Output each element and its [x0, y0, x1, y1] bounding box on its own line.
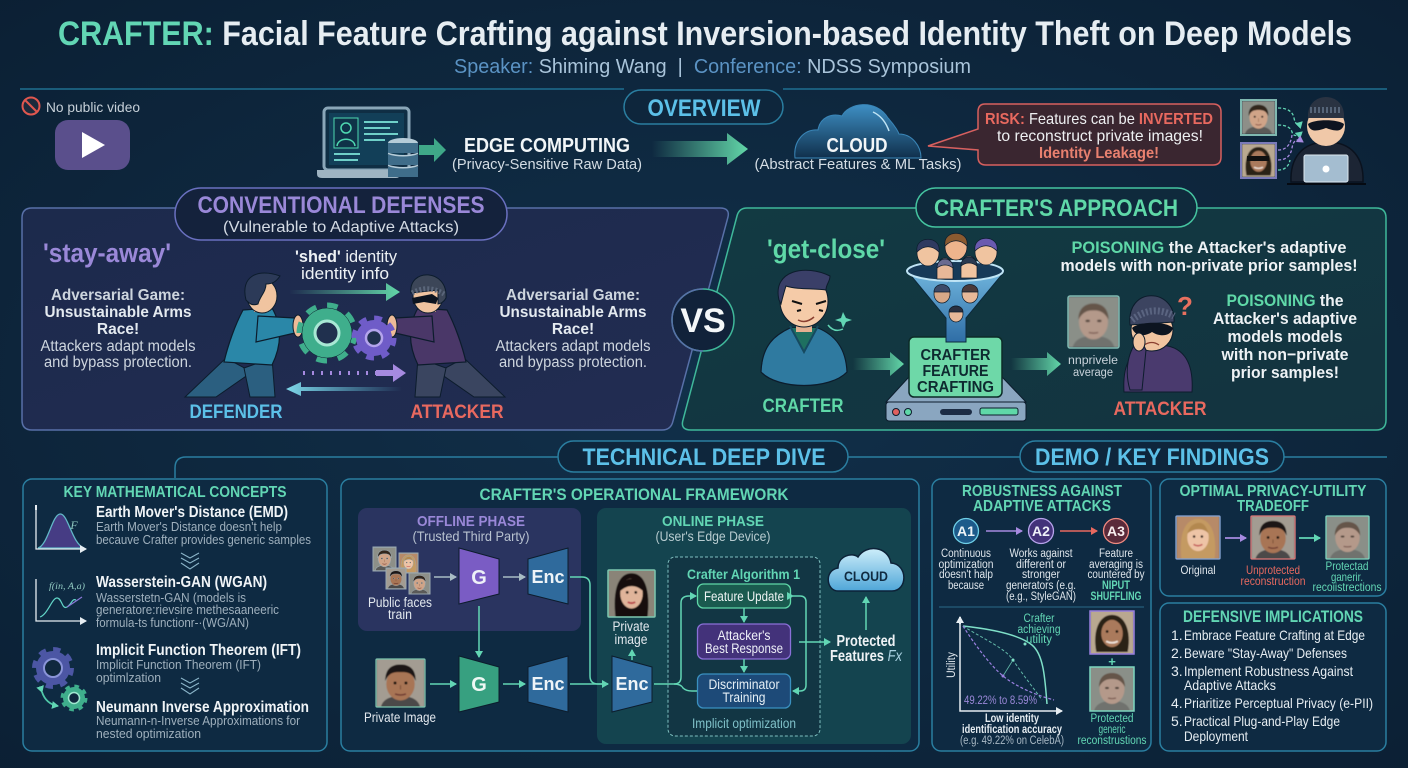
- image: original face: [1176, 516, 1220, 559]
- text: A3: averaging is: [1089, 559, 1143, 571]
- text: IFT: [96, 642, 301, 685]
- text: neumann: Neumann Inverse Approximation: [96, 699, 309, 716]
- text: edge computing: EDGE COMPUTING: [464, 135, 630, 157]
- list: implications: 2.: [1171, 645, 1183, 661]
- label: protected features: [830, 633, 903, 665]
- text: poisoning wide: POISONING the Attacker's adaptive: [1072, 238, 1346, 257]
- list: implications: 4.: [1171, 695, 1183, 711]
- text: poisoning wide: models with non-private prior samples!: [1060, 256, 1358, 275]
- arrow: A1 to A2: [986, 530, 1022, 532]
- arrow: offline encoder to online encoder: [570, 577, 608, 684]
- arrows: faces to hacker: [1278, 108, 1303, 170]
- heading: tradeoff: [1180, 483, 1367, 515]
- text: cloud: CLOUD: [826, 135, 888, 157]
- label: crafter achieving utility: [1018, 613, 1060, 646]
- label: protected generic reconstructions: ganerir.: [1331, 570, 1363, 584]
- image: private face: [376, 659, 425, 707]
- panel: robustness against adaptive attacks: [932, 479, 1151, 751]
- panel: operational framework: [341, 479, 919, 751]
- subtitle: speaker and conference: Speaker: Shiming Wang | Conference: NDSS Symposium: [454, 55, 971, 78]
- callout: risk: [928, 104, 1221, 165]
- heading: overview: [624, 90, 783, 124]
- panel: offline phase: OFFLINE PHASE: [417, 513, 525, 530]
- text: edge computing: (Privacy-Sensitive Raw Data): [452, 156, 642, 173]
- image: unprotected reconstruction: [1251, 516, 1295, 559]
- figure: crafter: [761, 270, 852, 386]
- icon: server base: [886, 378, 1026, 421]
- image: reconstructed face: [1090, 611, 1134, 654]
- label: low identification accuracy: (e.g. 49.22% on CelebA): [960, 735, 1064, 747]
- text: adversarial game left: Unsustainable Arms: [44, 304, 192, 321]
- badge: VS: [672, 289, 734, 351]
- icon: distribution chart: [36, 505, 86, 549]
- badge: VS: VS: [680, 302, 726, 340]
- figure: confused attacker: ?: [1177, 291, 1193, 321]
- arrow: crafter to funnel: [853, 352, 904, 376]
- label: protected features: Protected: [836, 633, 896, 650]
- text: cloud: [754, 135, 962, 173]
- text: IFT: Implicit Function Theorem (IFT): [96, 658, 261, 672]
- list: implications: Beware "Stay-Away" Defenses: [1184, 645, 1347, 661]
- text: cloud: (Abstract Features & ML Tasks): [754, 156, 962, 173]
- heading: technical deep dive: TECHNICAL DEEP DIVE: [582, 444, 826, 471]
- list: implications: Priaritize Perceptual Privacy (e-PII): [1184, 695, 1373, 711]
- label: implicit optimization: Implicit optimization: [692, 716, 796, 731]
- text: poisoning narrow: [1213, 291, 1357, 382]
- label: private image online: Private: [612, 619, 650, 634]
- text: IFT: optimlzation: [96, 671, 161, 685]
- label: unprotected reconstruction: [1240, 563, 1306, 588]
- label: protected generic reconstructions: recoiistrections: [1312, 580, 1382, 594]
- icon: cloud framework: CLOUD: [844, 568, 888, 584]
- notice: no public video: No public video: [46, 99, 140, 115]
- panel: key mathematical concepts: [23, 479, 327, 751]
- panel: optimal privacy-utility tradeoff: [1160, 479, 1386, 596]
- panel: offline phase: (Trusted Third Party): [412, 528, 530, 544]
- label: private image online: [612, 619, 650, 647]
- box: feature update: Feature Update: [704, 589, 784, 604]
- list: implications: Implement Robustness Against: [1184, 663, 1353, 679]
- text: adversarial game right: Race!: [552, 321, 594, 338]
- text: WGAN: formula-ts functionr-·(WG/AN): [96, 616, 249, 630]
- label: protected generic reconstructions: [1312, 559, 1382, 594]
- icon: video play button: [55, 120, 130, 170]
- panel: online phase: (User's Edge Device): [656, 528, 770, 544]
- label: crafter achieving utility: achieving: [1018, 624, 1060, 636]
- text: A2: stronger: [1022, 569, 1060, 581]
- box: attacker's best response: Best Response: [705, 641, 783, 656]
- label: protected generic reconstructions: Protectad: [1326, 559, 1368, 573]
- text: adversarial game left: Race!: [97, 321, 139, 338]
- label: crafter achieving utility: utility: [1026, 634, 1052, 646]
- label: attacker: ATTACKER: [410, 401, 504, 423]
- text: adversarial game right: and bypass protection.: [499, 354, 647, 371]
- badge: A1: A1: [957, 523, 975, 539]
- box: crafter feature crafting: FEATURE: [922, 363, 988, 380]
- list: implications: Practical Plug-and-Play Edge: [1184, 713, 1340, 729]
- list: implications: 1.: [1171, 627, 1183, 643]
- block: online encoder: Enc: [615, 674, 649, 694]
- text: edge computing: [452, 135, 642, 173]
- heading: robustness: ADAPTIVE ATTACKS: [973, 498, 1111, 515]
- text: poisoning narrow: Attacker's adaptive: [1213, 309, 1357, 328]
- icon: purple gear: [355, 319, 393, 357]
- block: encoder: [528, 656, 568, 712]
- list: implications: [1171, 627, 1373, 744]
- arrow: shed identity: [289, 283, 400, 301]
- figure: defender: [185, 273, 303, 397]
- chart: utility vs identification accuracy: 49.22% to 8.59%: [964, 693, 1037, 707]
- text: neumann: nested optimization: [96, 727, 201, 741]
- text: A3: Feature: [1099, 548, 1133, 560]
- block: online encoder: [612, 656, 652, 712]
- label: defender: DEFENDER: [190, 401, 282, 423]
- icon: funnel with faces: [907, 233, 1004, 342]
- label: protected features: Features Fx: [830, 648, 903, 665]
- callout: risk: to reconstruct private images!: [997, 128, 1203, 145]
- arrow: generator down: [478, 606, 480, 657]
- arrow: funnel to output: [1011, 352, 1061, 376]
- text: neumann: Neumann-n-Inverse Approximations for: [96, 714, 300, 728]
- arrow: encoder to online encoder: [570, 683, 608, 685]
- text: IFT: Implicit Function Theorem (IFT): [96, 642, 301, 659]
- panel: defensive implications: [1160, 603, 1386, 751]
- list: implications: Embrace Feature Crafting at Edge: [1184, 627, 1365, 643]
- list: implications: Adaptive Attacks: [1184, 677, 1276, 693]
- label: public faces train: Public faces: [368, 595, 432, 610]
- text: poisoning narrow: models models: [1228, 327, 1342, 346]
- arrow: laptop to edge computing: [419, 138, 446, 162]
- arrow: unprotected to protected: [1299, 537, 1320, 539]
- box: attacker's best response: Attacker's: [718, 628, 771, 643]
- text: WGAN: Wasserstein-GAN (WGAN): [96, 574, 267, 591]
- image: stolen faces: [1241, 100, 1276, 178]
- text: A2: (e.g., StyleGAN): [1006, 591, 1076, 603]
- caption: average: nnprivele: [1068, 355, 1118, 367]
- icon: WGAN chart: f(in, A,a): [49, 581, 85, 592]
- label: get-close: 'get-close': [767, 234, 885, 264]
- icon: chevrons: [181, 553, 199, 569]
- box: discriminator training: [698, 674, 790, 708]
- block: generator green: [459, 656, 499, 712]
- chart: utility vs identification accuracy: [946, 617, 1062, 711]
- text: A1: doesn't halp: [939, 569, 993, 581]
- box: feature update: [698, 584, 790, 608]
- label: low identification accuracy: Low identity: [985, 713, 1039, 725]
- text: shed identity: [295, 248, 398, 283]
- heading: conventional defenses: CONVENTIONAL DEFENSES: [198, 192, 484, 219]
- text: adversarial game left: [40, 287, 196, 371]
- label: low identification accuracy: [960, 713, 1064, 747]
- box: crafter feature crafting: CRAFTING: [917, 379, 994, 396]
- badge: A2: A2: [1032, 523, 1050, 539]
- panel: crafter algorithm 1: Crafter Algorithm 1: [687, 566, 800, 582]
- arrow: generator to encoder: [503, 576, 525, 578]
- badge: A3: [1104, 518, 1128, 544]
- label: protected generic reconstructions: generic: [1098, 724, 1126, 736]
- badge: A1: [954, 518, 978, 544]
- text: poisoning narrow: prior samples!: [1231, 363, 1339, 382]
- arrows: algorithm flow: [654, 596, 866, 691]
- text: A3: SHUFFLING: [1090, 591, 1142, 603]
- heading: demo / key findings: DEMO / KEY FINDINGS: [1035, 444, 1269, 471]
- heading: robustness: [962, 483, 1122, 515]
- text: A1: Continuous: [941, 548, 991, 560]
- text: A2: different or: [1016, 559, 1066, 571]
- arrow: cyan return: [286, 382, 402, 396]
- label: private image: Private Image: [364, 710, 436, 725]
- panel: online phase: [597, 508, 911, 744]
- figure: attacker: [387, 275, 505, 397]
- text: A2: generators (e.g.: [1006, 580, 1076, 592]
- arrow: public faces to generator: [434, 576, 456, 578]
- text: A1: because: [948, 580, 984, 592]
- label: crafter: CRAFTER: [762, 395, 844, 417]
- text: adversarial game left: Adversarial Game:: [51, 287, 185, 304]
- box: discriminator training: Training: [722, 690, 766, 705]
- panel: offline phase: [358, 508, 581, 631]
- box: crafter feature crafting: [909, 337, 1002, 397]
- heading: conventional defenses: [175, 188, 507, 240]
- label: low identification accuracy: identification accuracy: [962, 724, 1062, 736]
- text: adversarial game right: Unsustainable Arms: [500, 304, 646, 321]
- chart: utility vs identification accuracy: Utility: [946, 652, 958, 678]
- block: generator green: G: [471, 674, 487, 696]
- icon: green gear: [301, 307, 353, 359]
- text: A3: countered by: [1088, 569, 1145, 581]
- box: attacker's best response: [698, 624, 790, 659]
- label: protected generic reconstructions: Protected: [1090, 713, 1134, 725]
- panel: crafter's approach: [682, 188, 1386, 430]
- text: adversarial game right: Adversarial Game:: [506, 287, 640, 304]
- heading: defensive implications: DEFENSIVE IMPLICATIONS: [1183, 607, 1363, 626]
- text: poisoning narrow: with non−private: [1221, 345, 1348, 364]
- arrow: original to unprotected: [1225, 537, 1246, 539]
- text: EMD: Earth Mover's Distance (EMD): [96, 504, 288, 521]
- icon: cloud framework: [828, 549, 904, 591]
- icon: WGAN chart: [36, 579, 86, 621]
- text: EMD: becauve Crafter provides generic samples: [96, 533, 311, 547]
- text: WGAN: Wasserstetn-GAN (models is: [96, 591, 246, 605]
- icon: hacker with laptop: [1287, 97, 1366, 184]
- label: public faces train: [368, 595, 432, 622]
- label: crafter achieving utility: Crafter: [1024, 613, 1055, 625]
- icon: chevrons: [181, 678, 199, 694]
- caption: average: [1068, 355, 1118, 379]
- arrow: green generator to encoder: [503, 683, 525, 685]
- text: adversarial game right: [496, 287, 651, 371]
- block: encoder offline: [528, 548, 568, 604]
- image: public faces: [373, 547, 430, 594]
- box: crafter feature crafting: CRAFTER: [920, 347, 990, 364]
- text: EMD: [96, 504, 311, 547]
- caption: average: average: [1073, 367, 1113, 379]
- text: A1: [938, 548, 994, 592]
- block: encoder offline: Enc: [531, 567, 565, 587]
- label: private image online: image: [614, 632, 648, 647]
- image: online private face: [608, 570, 655, 617]
- image: protected generic reconstruction: [1326, 516, 1369, 559]
- text: WGAN: [96, 574, 279, 630]
- label: protected generic reconstructions: reconstrustions: [1078, 735, 1147, 747]
- text: EMD: Earth Mover's Distance doesn't help: [96, 520, 282, 534]
- text: A2: Works against: [1010, 548, 1073, 560]
- label: unprotected reconstruction: reconstruction: [1240, 574, 1306, 588]
- list: implications: Deployment: [1184, 728, 1248, 744]
- panel: conventional defenses: [22, 188, 728, 430]
- heading: crafter's approach: CRAFTER'S APPROACH: [934, 195, 1178, 222]
- text: A1: optimization: [938, 559, 994, 571]
- label: public faces train: train: [388, 607, 412, 622]
- heading: tradeoff: TRADEOFF: [1237, 498, 1309, 515]
- heading: robustness: ROBUSTNESS AGAINST: [962, 483, 1122, 500]
- text: poisoning wide: [1060, 238, 1358, 275]
- label: protected generic reconstructions: [1078, 713, 1147, 747]
- icon: distribution chart: F: [69, 518, 78, 532]
- heading: crafter's approach: [916, 188, 1197, 227]
- icon: laptop with database: [317, 108, 418, 178]
- label: stay-away: 'stay-away': [43, 238, 171, 268]
- icon: cloud: [795, 105, 921, 158]
- text: WGAN: generatore:rievsire methesaaneeric: [96, 603, 279, 617]
- icon: optimization gears: [36, 651, 85, 709]
- panel: online phase: ONLINE PHASE: [662, 513, 764, 530]
- box: discriminator training: Discriminator: [708, 677, 780, 692]
- text: adversarial game right: Attackers adapt models: [496, 338, 651, 355]
- panel: crafter algorithm 1: [668, 557, 820, 736]
- block: generator purple: [459, 548, 499, 604]
- arrow: encoder up to image: [631, 650, 633, 660]
- text: shed identity: identity info: [301, 265, 389, 283]
- heading: operational framework: CRAFTER'S OPERATIONAL FRAMEWORK: [480, 486, 789, 504]
- image: non-private average face: [1068, 296, 1119, 348]
- text: shed identity: 'shed' identity: [295, 248, 398, 266]
- figure: confused attacker: [1124, 291, 1193, 392]
- list: implications: 3.: [1171, 663, 1183, 679]
- text: poisoning narrow: POISONING the: [1226, 291, 1344, 310]
- arrow: edge to cloud: [652, 133, 748, 165]
- text: A3: NIPUT: [1102, 580, 1130, 592]
- block: encoder: Enc: [531, 674, 565, 694]
- heading: tradeoff: OPTIMAL PRIVACY-UTILITY: [1180, 483, 1367, 500]
- arrow: private image to generator: [430, 683, 456, 685]
- arrow: dotted purple: [303, 364, 406, 382]
- label: attacker: ATTACKER: [1114, 398, 1206, 420]
- heading: key mathematical concepts: KEY MATHEMATICAL CONCEPTS: [64, 484, 286, 501]
- text: neumann: [96, 699, 309, 741]
- label: original: Original: [1180, 563, 1216, 577]
- icon: plus: +: [1108, 654, 1116, 669]
- text: A3: [1088, 548, 1145, 603]
- text: adversarial game left: and bypass protection.: [44, 354, 192, 371]
- list: implications: 5.: [1171, 713, 1183, 729]
- text: A2: [1006, 548, 1076, 603]
- callout: risk: RISK: Features can be INVERTED: [985, 111, 1213, 128]
- badge: A3: A3: [1107, 523, 1125, 539]
- callout: risk: Identity Leakage!: [1039, 145, 1159, 162]
- label: unprotected reconstruction: Unprotected: [1246, 563, 1300, 577]
- image: protected generic face: [1090, 667, 1134, 711]
- badge: A2: [1028, 518, 1054, 544]
- heading: conventional defenses: (Vulnerable to Adaptive Attacks): [223, 219, 459, 236]
- block: generator purple: G: [471, 567, 487, 589]
- arrow: A2 to A3: [1060, 530, 1097, 532]
- text: adversarial game left: Attackers adapt models: [40, 338, 196, 355]
- heading: overview: OVERVIEW: [648, 95, 761, 122]
